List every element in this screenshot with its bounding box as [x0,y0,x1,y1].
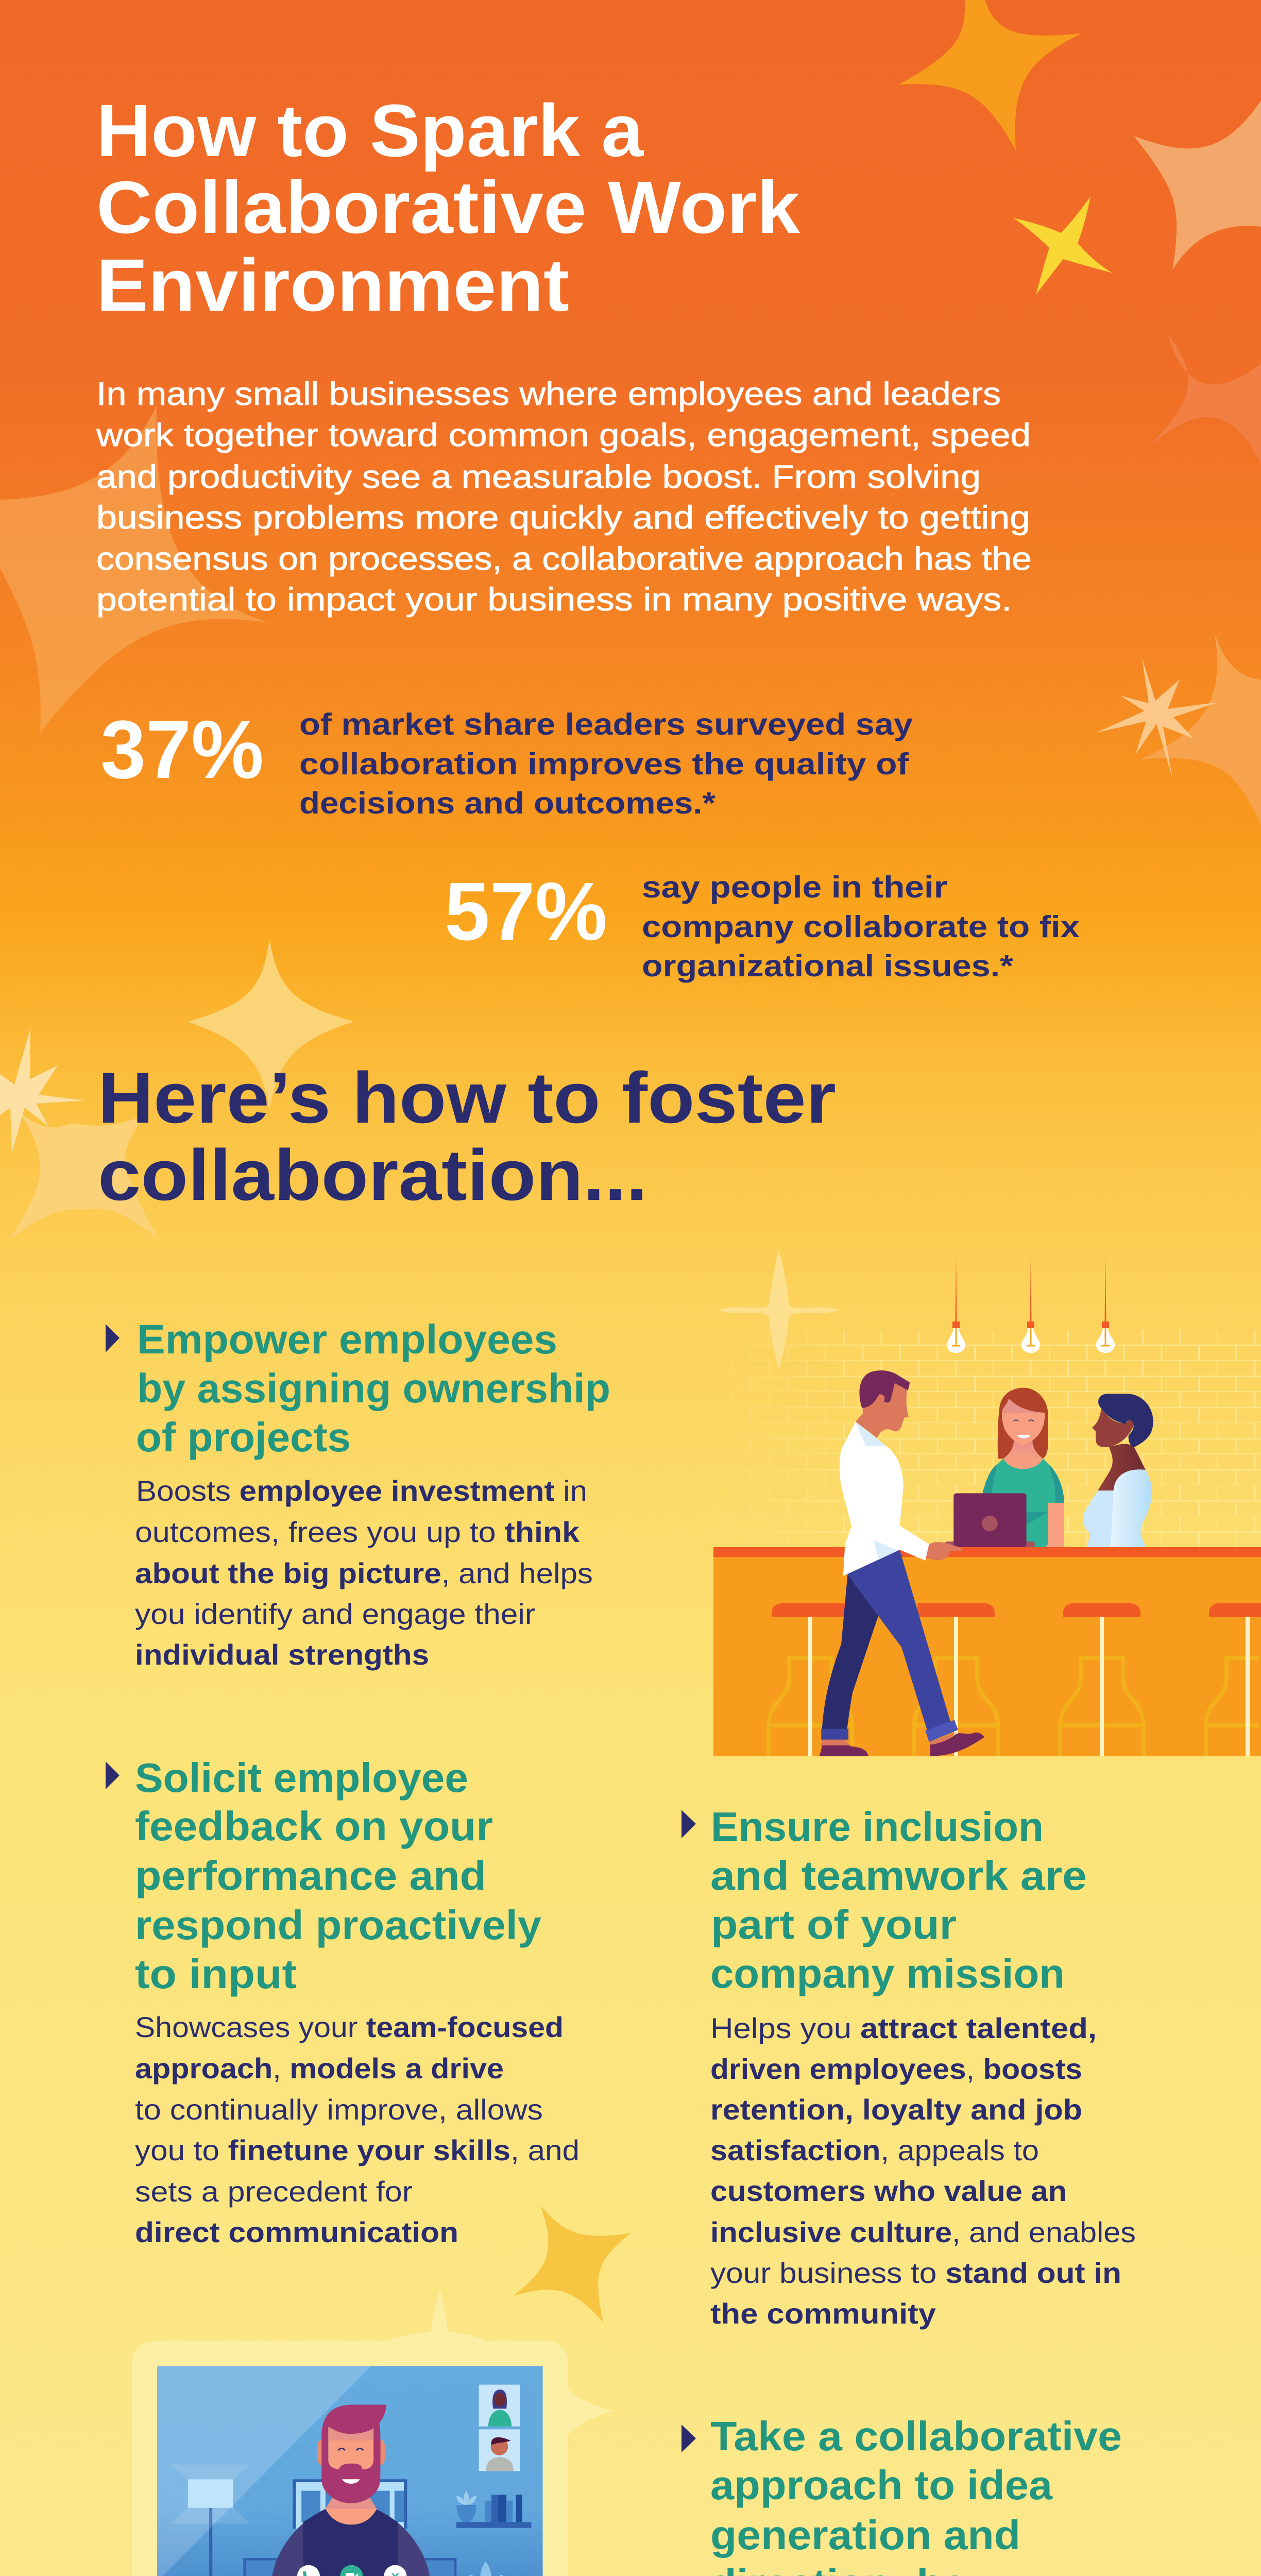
walking man [820,1370,984,1756]
plant [469,2562,503,2576]
body text: you to finetune your skills , and [135,2134,580,2166]
stat: 57%: organizational issues.* [642,949,1013,983]
sparkle: gold [514,2206,631,2323]
illustration: team at a counter [713,1256,1261,1756]
laptop [945,1493,1035,1547]
stat: 57%: company collaborate to fix [642,910,1080,944]
heading: and teamwork are [710,1853,1087,1899]
sparkle: pale centre [188,939,354,1110]
stat: 57% [445,865,1080,983]
wall picture [293,2479,407,2529]
laptop body [132,2341,568,2576]
heading: Ensure inclusion [711,1804,1044,1850]
shelf with books and vase [456,2491,531,2528]
intro paragraph: In many small businesses where employees and leaders [96,376,1001,412]
heading: Empower employees [137,1316,557,1362]
stat: 37%: of market share leaders surveyed say [299,707,913,741]
tip 4: take a collaborative approach [681,2413,1162,2576]
body text: retention, loyalty and job [710,2093,1082,2126]
decorative sparkles [0,0,1261,1370]
body text: your business to stand out in [710,2257,1121,2289]
sparkle: soft orange right [1146,334,1261,463]
heading: performance and [135,1853,486,1899]
arrow [681,2425,696,2452]
body text: Showcases your team-focused [135,2011,564,2043]
body text: Boosts employee investment in [136,1475,587,1507]
sparkle: yellow [1013,196,1113,295]
body text: sets a precedent for [135,2175,413,2208]
pendant lights [947,1256,1115,1353]
sparkle: peach right edge [1134,100,1261,270]
sparkle: orange top right [899,0,1082,150]
intro paragraph: and productivity see a measurable boost. From solving [96,459,981,495]
heading: of projects [136,1414,351,1460]
section heading: Here’s how to foster [98,1057,836,1138]
heading [710,1804,1087,1996]
heading: by assigning ownership [137,1365,610,1411]
intro paragraph: work together toward common goals, engagement, speed [96,417,1031,453]
desk [245,2559,455,2576]
stat: 57%: say people in their [642,870,947,904]
man with beard [271,2405,431,2576]
sparkle: peach lower right [1140,632,1261,824]
intro paragraph: consensus on processes, a collaborative approach has the [96,541,1032,577]
heading: Solicit employee [135,1755,468,1801]
body text [135,2011,580,2248]
intro paragraph: business problems more quickly and effectively to getting [96,500,1030,536]
stool frames [769,1658,1259,1756]
video participants [479,2385,520,2471]
intro paragraph [96,376,1032,618]
arrow [681,1810,696,1838]
intro paragraph: potential to impact your business in many positive ways. [96,582,1012,618]
glass reflection [157,2366,371,2576]
heading [136,1316,610,1460]
heading: to input [135,1951,297,1997]
body text: direct communication [135,2216,458,2248]
lamp [170,2465,250,2576]
sparkle: spiky right [1096,658,1218,778]
stat: 37%: collaboration improves the quality of [299,747,909,781]
sparkle: large pale left [0,405,269,733]
woman with red hair [983,1388,1064,1547]
illustration: video call on laptop [81,2206,631,2576]
body text: customers who value an [710,2175,1067,2207]
sparkle: pale behind laptop [387,2289,614,2435]
body text [710,2012,1136,2330]
stat: 37%: 37% [100,703,264,795]
body text: approach , models a drive [135,2052,504,2084]
heading: approach to idea [710,2462,1053,2508]
stool seats and legs [772,1603,1261,1756]
stat: 37%: decisions and outcomes.* [299,786,715,820]
body text: the community [710,2297,936,2330]
sparkle: large pale lower left [10,1108,159,1240]
heading: Take a collaborative [710,2413,1122,2459]
section heading: collaboration... [98,1134,647,1215]
heading: part of your [711,1902,957,1947]
body text: about the big picture , and helps [135,1557,593,1589]
heading: feedback on your [135,1803,493,1849]
section heading [98,1057,836,1215]
arrow [106,1761,120,1789]
stat: 57%: 57% [445,865,607,957]
counter [713,1547,1261,1756]
heading [135,1755,542,1997]
tip 1: empower employees [106,1316,610,1671]
title: Collaborative Work [96,166,800,249]
laptop screen [157,2366,543,2576]
body text: Helps you attract talented, [710,2012,1097,2044]
arrow [106,1324,120,1352]
woman with navy hair [1083,1394,1153,1547]
stat: 37% [100,703,913,820]
body text: satisfaction , appeals to [710,2134,1039,2166]
heading: respond proactively [135,1902,542,1948]
title [96,89,800,327]
brick wall [713,1330,1261,1547]
call buttons [297,2565,407,2576]
body text: inclusive culture , and enables [710,2216,1136,2248]
body text: driven employees , boosts [710,2053,1082,2085]
body text: to continually improve, allows [135,2093,543,2126]
people and laptop [820,1370,1153,1756]
body text: individual strengths [135,1638,429,1671]
tip 3: ensure inclusion and teamwork [681,1804,1136,2330]
body text [135,1475,593,1671]
sparkle: pale four point [719,1249,839,1370]
body text: outcomes, frees you up to think [135,1516,580,1548]
heading [710,2413,1122,2576]
counter top [713,1547,1261,1557]
title: How to Spark a [96,89,644,172]
body text: you identify and engage their [135,1598,535,1630]
heading: generation and [710,2512,1020,2558]
sparkle: spiky left [0,1028,84,1153]
heading: company mission [710,1951,1065,1996]
title: Environment [96,244,569,327]
tip 2: solicit employee feedback [106,1755,580,2248]
